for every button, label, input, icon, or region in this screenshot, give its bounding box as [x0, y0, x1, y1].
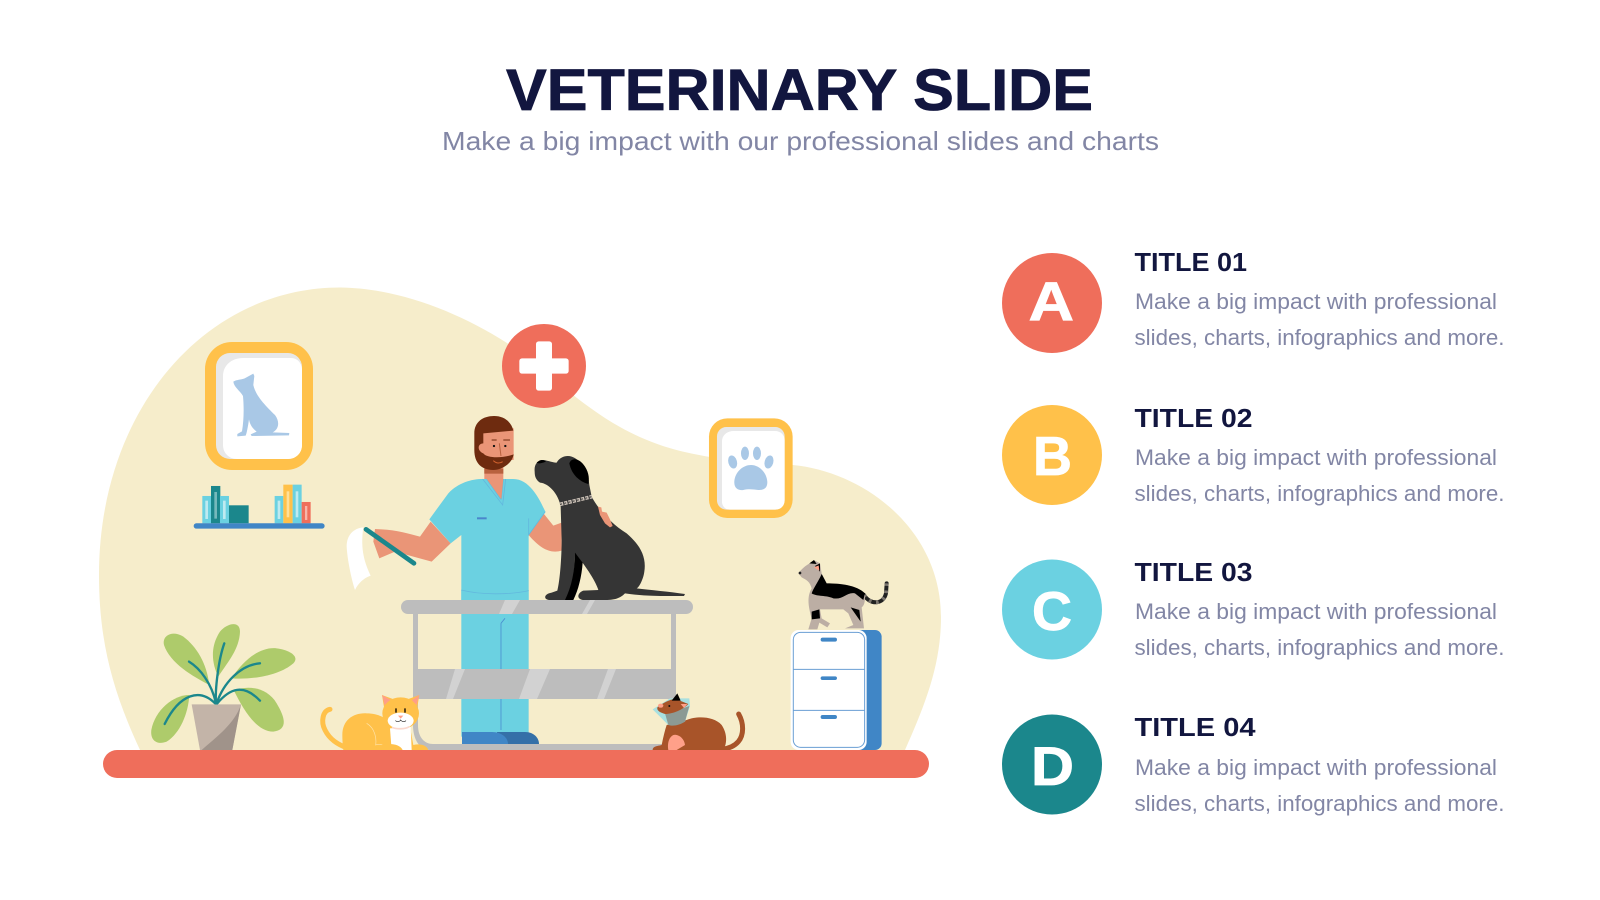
description 04: Make a big impact with professional	[1135, 755, 1497, 780]
letter A: A	[1028, 270, 1074, 332]
scrub trousers	[461, 590, 529, 737]
description 01: Make a big impact with professional	[1135, 289, 1497, 314]
vet hand on dog	[598, 507, 613, 527]
head	[478, 428, 514, 460]
item D	[1002, 712, 1504, 816]
badge C	[1002, 560, 1102, 660]
subtitle: Make a big impact with our professional slides and charts	[442, 126, 1159, 156]
item C	[1002, 557, 1504, 660]
icon: medical cross	[502, 324, 586, 408]
standing cat	[798, 560, 887, 629]
heading 01: TITLE 01	[1134, 247, 1247, 277]
heading 03: TITLE 03	[1134, 557, 1252, 587]
dog collar chain	[560, 497, 592, 504]
description 04: slides, charts, infographics and more.	[1134, 791, 1504, 816]
tablet	[366, 529, 414, 563]
description 03: Make a big impact with professional	[1135, 599, 1497, 624]
filing cabinet	[791, 630, 882, 750]
vet shoes	[462, 732, 539, 744]
trouser seam	[501, 618, 505, 730]
badge B	[1002, 405, 1102, 505]
scrub top	[429, 479, 545, 600]
description 03: slides, charts, infographics and more.	[1134, 635, 1504, 660]
examination table	[401, 600, 693, 750]
far arm	[529, 514, 562, 552]
background blob	[99, 288, 941, 750]
neck	[484, 467, 503, 499]
description 01: slides, charts, infographics and more.	[1134, 325, 1504, 350]
heading 04: TITLE 04	[1134, 712, 1256, 742]
frame: paw print	[709, 418, 793, 518]
icon: dog silhouette	[233, 374, 289, 436]
badge D	[1002, 714, 1102, 814]
item B	[1002, 403, 1504, 506]
orange cat	[323, 695, 428, 750]
description 02: Make a big impact with professional	[1135, 445, 1497, 470]
black dog	[535, 456, 685, 600]
illustration: veterinary clinic	[99, 288, 941, 778]
description 02: slides, charts, infographics and more.	[1134, 481, 1504, 506]
title: VETERINARY SLIDE	[506, 58, 1093, 123]
letter D: D	[1031, 735, 1074, 797]
heading 02: TITLE 02	[1134, 403, 1252, 433]
icon: paw	[727, 447, 775, 490]
veterinarian	[347, 416, 562, 737]
frame: dog picture	[205, 342, 313, 470]
near arm and hand	[373, 522, 451, 562]
clipboard paper	[347, 527, 371, 590]
shelf with books	[194, 485, 325, 529]
plant in pot	[151, 624, 295, 750]
letter B: B	[1033, 425, 1072, 487]
letter C: C	[1032, 580, 1072, 642]
cat with cone collar	[653, 693, 743, 750]
badge A	[1002, 253, 1102, 353]
item A	[1002, 247, 1504, 353]
floor	[103, 750, 929, 778]
